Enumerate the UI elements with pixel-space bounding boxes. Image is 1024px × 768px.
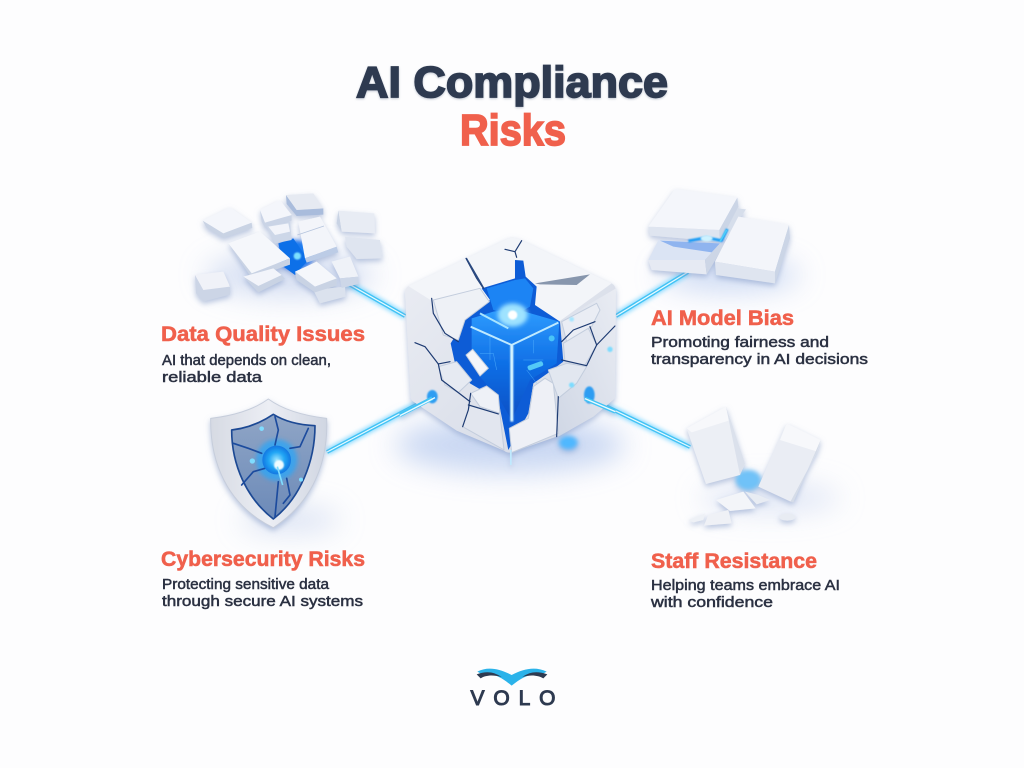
beam: cybersecurity — [327, 394, 437, 452]
heading block: cybersecurity: Protecting sensitive data — [162, 576, 330, 593]
cracks — [415, 241, 615, 437]
title: Risks — [460, 106, 566, 155]
icon: AI model bias split slabs — [648, 189, 790, 283]
icon: staff resistance split blocks — [687, 407, 821, 526]
logo: Volo — [470, 669, 556, 710]
glowing opening — [451, 260, 563, 450]
icon: central cracked cube — [400, 238, 616, 465]
beam: data quality — [347, 283, 405, 316]
cracked fragments — [433, 288, 600, 453]
icon: cybersecurity shield — [211, 399, 327, 528]
soft floor shadows — [205, 253, 840, 532]
heading block: cybersecurity: through secure AI systems — [162, 593, 363, 610]
glow sparks — [569, 382, 574, 388]
cube left face — [405, 238, 616, 453]
heading block: data quality: AI that depends on clean, — [162, 352, 331, 369]
beam: staff resistance — [585, 396, 690, 447]
heading block: data quality: reliable data — [162, 369, 263, 386]
heading block: AI model bias: AI Model Bias — [651, 307, 794, 330]
heading block: staff resistance — [650, 550, 840, 611]
beam: AI model bias — [616, 272, 688, 316]
heading block: data quality — [161, 323, 365, 386]
heading block: data quality: Data Quality Issues — [161, 323, 365, 346]
heading block: cybersecurity — [161, 548, 365, 610]
heading block: staff resistance: with confidence — [650, 594, 773, 611]
logo: Volo: VOLO — [470, 687, 556, 710]
beam sockets — [427, 390, 438, 403]
icon: wave — [477, 669, 547, 686]
heading block: AI model bias: transparency in AI decisions — [651, 351, 868, 368]
title: AI Compliance — [356, 58, 668, 107]
heading block: staff resistance: Helping teams embrace AI — [651, 577, 840, 594]
exposed glowing core — [472, 308, 559, 420]
cube top face — [408, 238, 612, 345]
heading block: cybersecurity: Cybersecurity Risks — [161, 548, 365, 571]
heading block: AI model bias — [651, 307, 868, 368]
connector beams — [327, 272, 690, 452]
heading block: AI model bias: Promoting fairness and — [651, 334, 829, 351]
heading block: staff resistance: Staff Resistance — [651, 550, 817, 573]
title — [356, 58, 668, 155]
cube right face — [557, 288, 616, 437]
icon: scattered data blocks — [195, 193, 382, 303]
title: AI Compliance — [356, 59, 668, 108]
